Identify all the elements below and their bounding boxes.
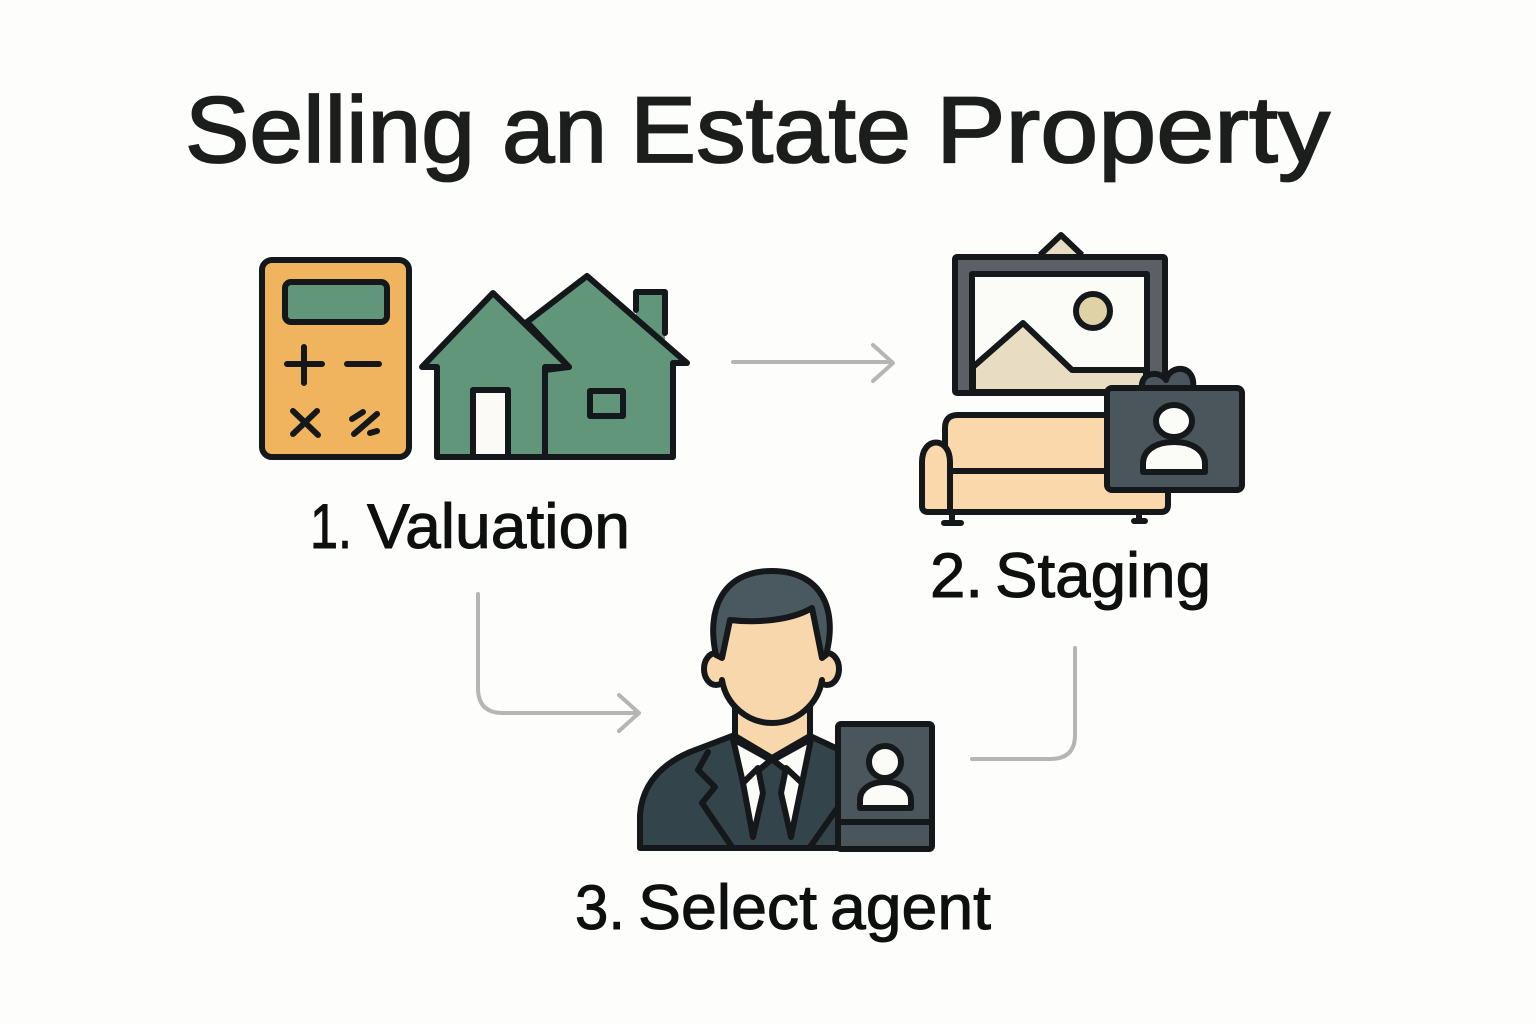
label: step 3: 3. [575, 873, 625, 943]
label: step 3: Select [638, 873, 817, 943]
icon: agent person [640, 571, 840, 848]
label: step 1: 1. [310, 492, 352, 562]
arrow: staging to agent [972, 648, 1075, 759]
label: step 3: agent [830, 873, 992, 943]
arrow: valuation to agent [478, 594, 639, 731]
icon: calculator [262, 260, 409, 457]
icon: framed picture [955, 235, 1165, 393]
title: Estate [630, 77, 911, 182]
label: step 3 [575, 873, 992, 943]
title [185, 77, 1330, 182]
icon: agent card [838, 724, 932, 849]
title: an [502, 77, 607, 182]
title: Selling [185, 77, 475, 182]
icon: agent badge small [1107, 369, 1242, 490]
icon: sofa [922, 415, 1168, 523]
label: step 1: Valuation [367, 492, 630, 562]
icon: houses [422, 276, 687, 457]
arrow: valuation to staging [733, 345, 893, 381]
label: step 2: 2. [930, 541, 983, 611]
label: step 2: Staging [995, 541, 1211, 611]
title: Property [936, 77, 1330, 182]
